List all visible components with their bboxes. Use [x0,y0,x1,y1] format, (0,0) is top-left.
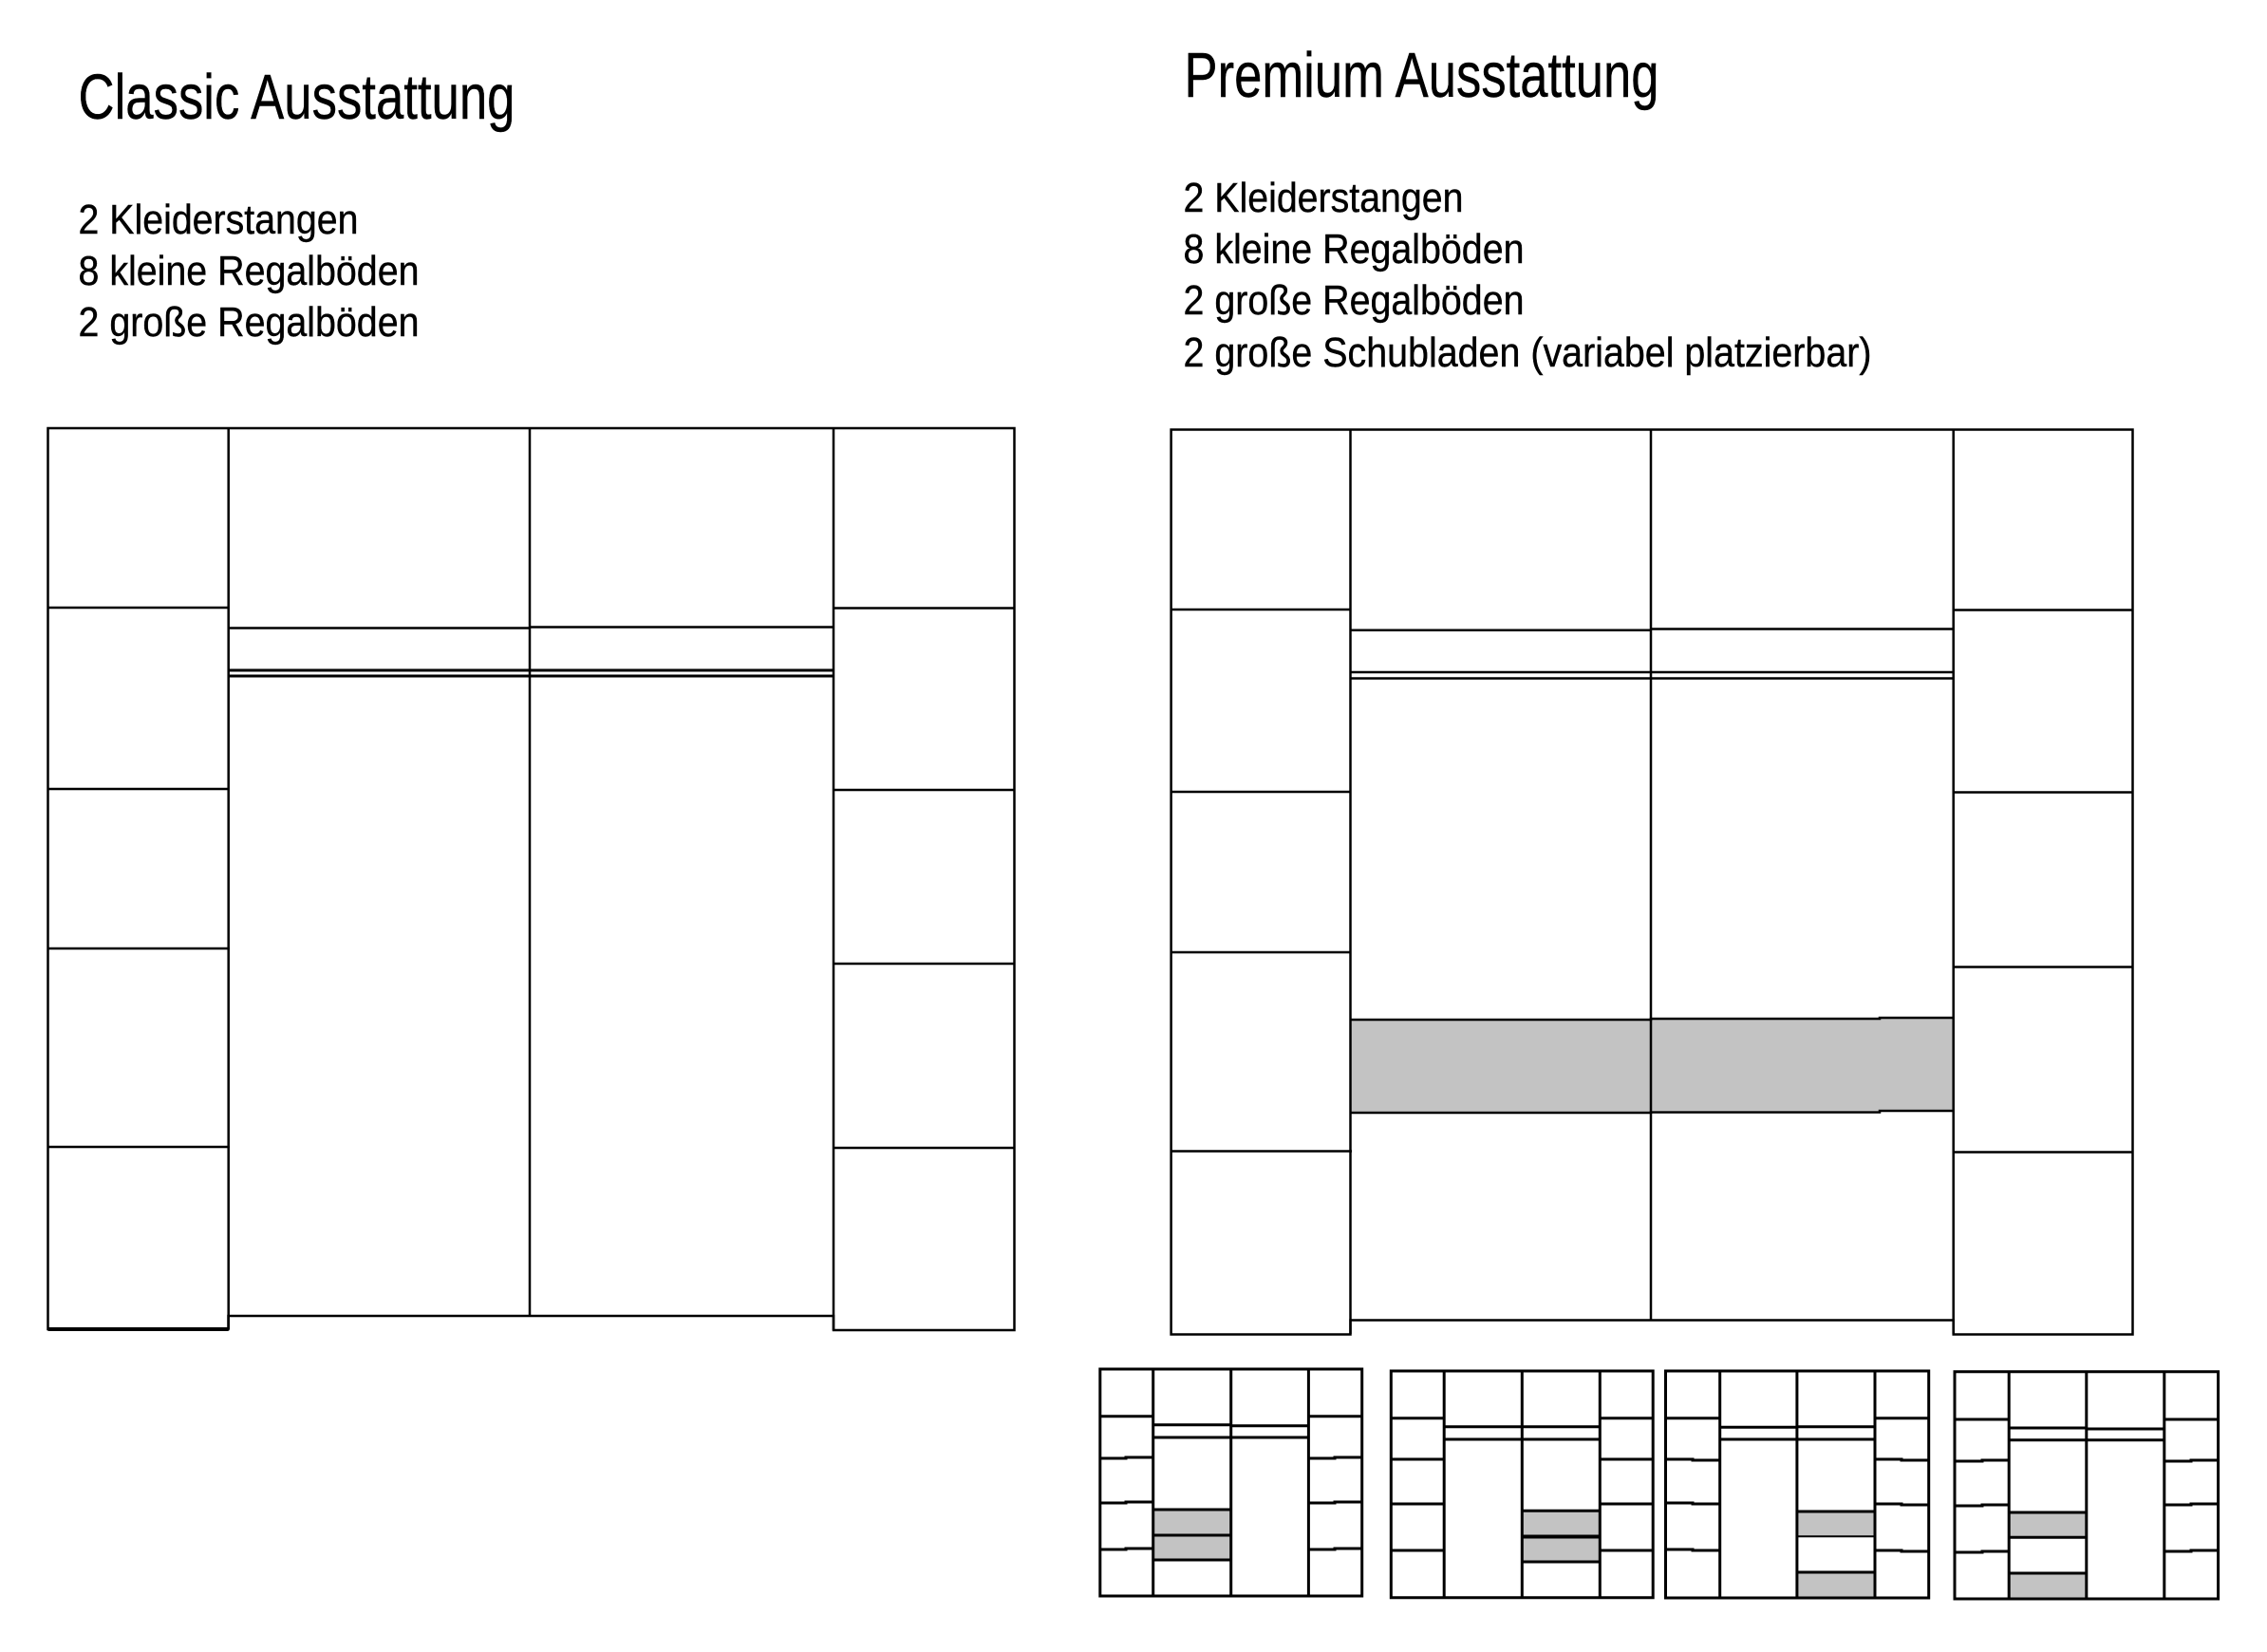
text block: Classic feature list: 2 große Regalböden [78,299,420,346]
clothes rails [229,670,834,676]
diagram: Classic wardrobe [47,428,1014,1330]
text block: Premium feature list: 2 große Regalböden [1183,277,1525,324]
drawers [1351,1017,1953,1113]
text block: Classic feature list: 8 kleine Regalböden [78,248,420,294]
diagram: Premium wardrobe with drawers [1171,429,2132,1335]
right shelves [834,608,1014,1148]
left shelves [47,608,230,1147]
diagram: variant 4, drawers apart left [1955,1372,2219,1599]
diagram: variant 2, drawers stacked right [1391,1371,1653,1598]
large shelves [229,627,834,629]
drawer edges [1350,1018,1954,1113]
text block: Classic feature list: 2 Kleiderstangen [78,197,359,243]
diagram: variant 1, drawers stacked left [1100,1369,1362,1596]
panel: Classic Ausstattung text [78,62,515,346]
panel: Premium Ausstattung text [1183,40,1872,376]
text block: Classic feature list [78,197,420,346]
heading: Premium Ausstattung: Premium Ausstattung [1185,40,1659,111]
text block: Premium feature list: 2 große Schubladen (variabel platzierbar) [1183,329,1872,376]
text block: Premium feature list: 2 Kleiderstangen [1183,175,1464,221]
clothes rails [1350,672,1954,678]
text block: Premium feature list [1183,175,1872,376]
heading: Classic Ausstattung: Classic Ausstattung [78,62,515,133]
left shelves [1171,610,1352,1151]
text block: Premium feature list: 8 kleine Regalböden [1183,226,1525,272]
large shelves [1350,629,1954,630]
diagram: variant 3, drawers apart right [1665,1371,1929,1598]
right shelves [1954,610,2132,1153]
